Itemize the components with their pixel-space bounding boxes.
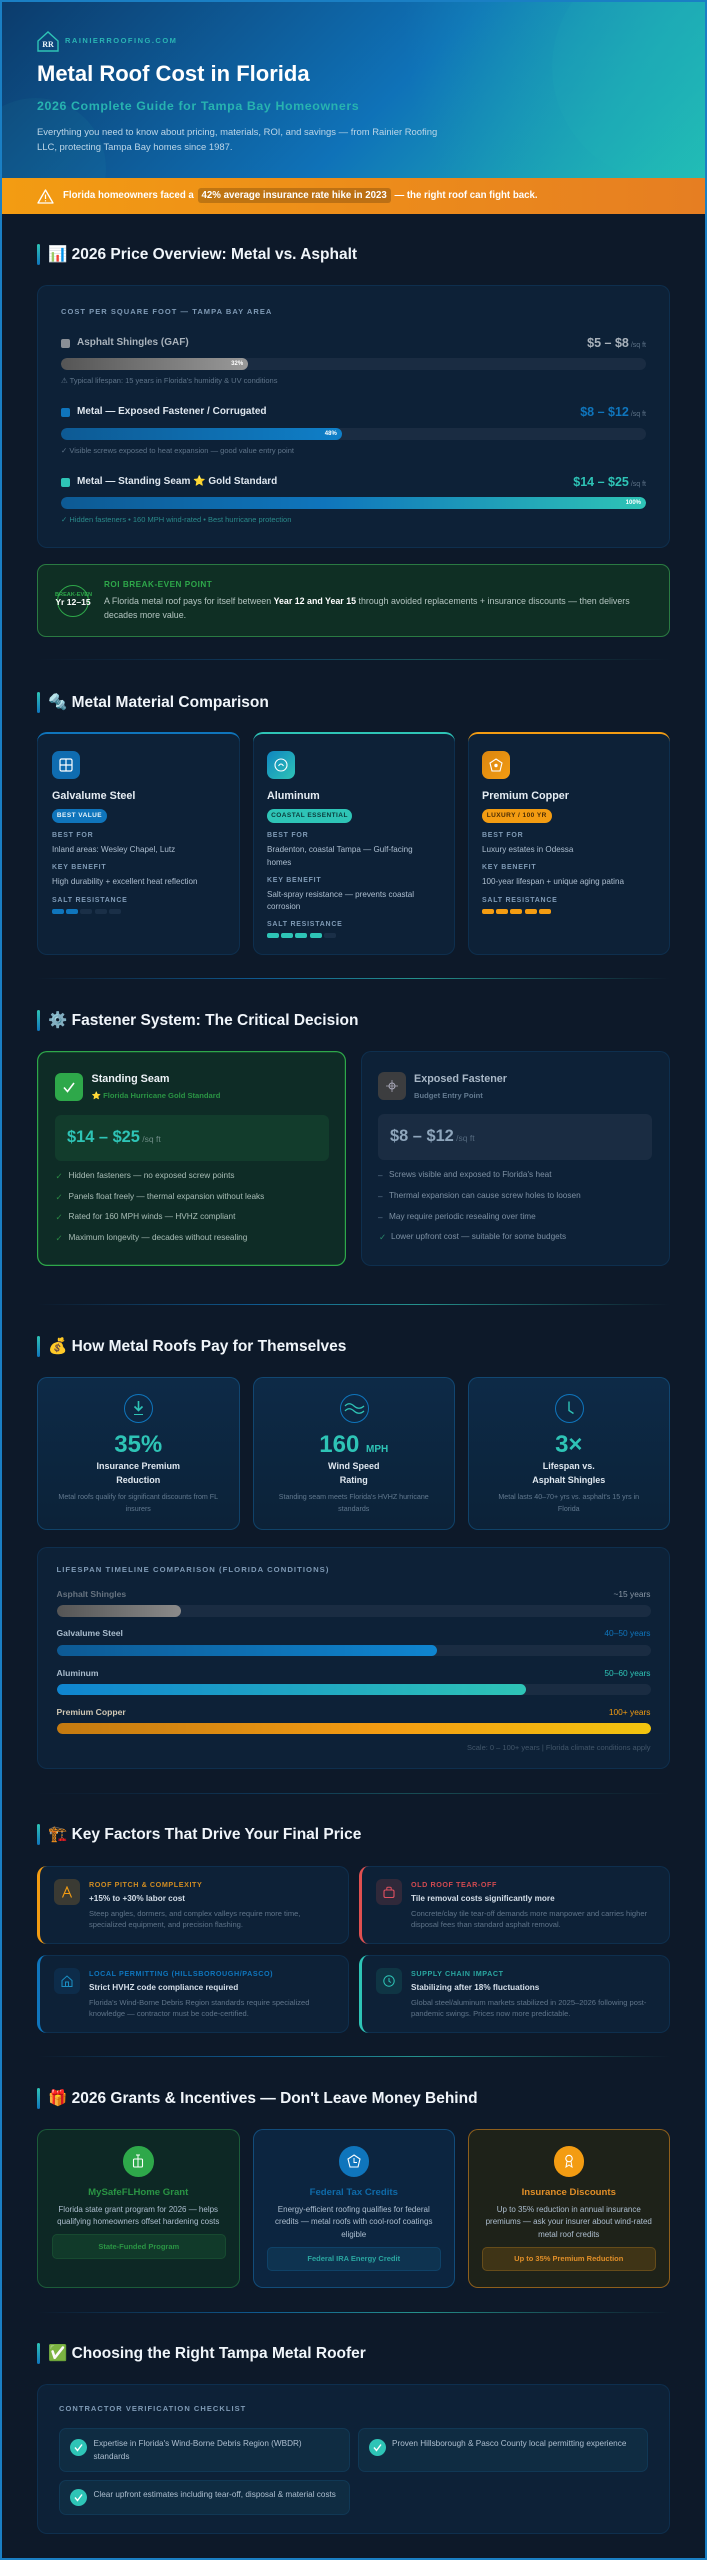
stat description [279,1492,429,1512]
feature list: ✓ [56,1192,62,1202]
grant title: MySafeFLHome Grant [88,2187,188,2198]
panel: standing seam [37,1051,346,1266]
panel: permitting [37,1955,348,2033]
details: 100-year lifespan + unique aging patina [482,877,624,886]
grant text: Florida state grant program for 2026 — helps [58,2205,218,2214]
price row: asphalt: ⚠ Typical lifespan: 15 years in Florida's humidity & UV conditions [61,376,277,385]
factor label: LOCAL PERMITTING (HILLSBOROUGH/PASCO) [89,1969,273,1978]
price row: standing seam: ✓ Hidden fasteners • 160 MPH wind-rated • Best hurricane protection [61,515,291,524]
checklist title: CONTRACTOR VERIFICATION CHECKLIST [59,2404,246,2413]
feature list: Thermal expansion can cause screw holes to loosen [389,1191,581,1200]
stat description: Metal lasts 40–70+ yrs vs. asphalt's 15 yrs in [498,1492,639,1500]
heading: fastener system: ⚙️ Fastener System: The Critical Decision [48,1012,358,1029]
heading: material comparison: 🔩 Metal Material Comparison [48,694,269,711]
badge: BEST VALUE [57,812,102,819]
factor description: disposal fees than standard asphalt removal. [411,1920,561,1929]
details: SALT RESISTANCE [267,921,343,928]
stat value: 160 MPH [319,1431,388,1458]
icon: gem [482,751,510,779]
heading: choosing roofer: ✅ Choosing the Right Tampa Metal Roofer [48,2345,366,2362]
factor description [411,1909,647,1929]
panel: tear-off [359,1866,670,1944]
heading: key factors: 🏗️ Key Factors That Drive Your Final Price [48,1826,361,1843]
timeline: galvalume: Galvalume Steel [56,1628,123,1638]
icon: wind [340,1394,369,1423]
badge: break-even circle [57,585,89,617]
details [267,832,414,938]
details: Salt-spray resistance — prevents coastal [267,890,414,898]
panel: lifespan timeline [37,1547,670,1769]
factor description: Concrete/clay tile tear-off demands more manpower and carries higher [411,1909,647,1918]
icon: house [54,1968,80,1994]
checklist item: permitting: Proven Hillsborough & Pasco County local permitting experience [392,2439,626,2448]
details: High durability + excellent heat reflection [52,877,198,886]
price box: $14 – $25 /sq ft [67,1128,161,1146]
timeline: aluminum: 50–60 years [604,1668,650,1678]
chart title: LIFESPAN TIMELINE COMPARISON (FLORIDA CONDITIONS) [56,1565,329,1574]
grant text [275,2205,432,2238]
price row: exposed fastener: Metal — Exposed Fastener / Corrugated [77,406,266,417]
feature list: Lower upfront cost — suitable for some budgets [391,1232,566,1241]
stat label [96,1461,180,1485]
badge [52,809,107,823]
factor headline: +15% to +30% labor cost [89,1894,185,1903]
material name: Premium Copper [482,790,569,802]
icon: pitch [54,1879,80,1905]
badge: COASTAL ESSENTIAL [271,812,348,819]
feature list: – [378,1212,383,1222]
panel: roof pitch [37,1866,348,1944]
brand url: RAINIERROOFING.COM [65,36,177,44]
grant text: Up to 35% reduction in annual insurance [497,2205,641,2214]
feature list: – [378,1171,383,1180]
details: Luxury estates in Odessa [482,845,573,854]
price row: asphalt: 32% [231,361,243,367]
grant tag [267,2246,440,2271]
icon: orange circle [554,2146,584,2176]
panel: wind stat [252,1377,455,1530]
details: BEST FOR [267,832,308,839]
panel: lifespan stat [468,1377,670,1530]
factor description: Steep angles, dormers, and complex valleys require more time, [89,1909,300,1918]
details: SALT RESISTANCE [52,897,128,904]
feature list [56,1171,264,1243]
alert banner [0,178,707,214]
panel: price overview [37,285,670,548]
badge: LUXURY / 100 YR [487,812,547,819]
grant tag [52,2234,226,2259]
icon: clock [555,1394,584,1423]
stat description: Metal roofs qualify for significant discounts from FL [58,1492,218,1500]
price box [55,1114,329,1161]
option subtitle: ⭐ Florida Hurricane Gold Standard [92,1091,220,1100]
timeline: aluminum: Aluminum [56,1668,99,1678]
header [0,0,707,178]
panel: galvalume steel [37,732,240,955]
grant text: eligible [341,2230,366,2238]
panel: insurance stat [37,1377,240,1530]
icon: clock [376,1968,402,1994]
grant title: Insurance Discounts [522,2187,616,2198]
details [482,832,624,914]
panel: aluminum [252,732,455,955]
intro text: Everything you need to know about pricing, materials, ROI, and savings — from Rainier Roofing [37,126,437,138]
icon: bag [376,1879,402,1905]
icon: circle [267,751,295,779]
feature list: Hidden fasteners — no exposed screw points [68,1171,235,1180]
factor description: knowledge — contractor must be code-certified. [89,2008,249,2018]
timeline: asphalt [56,1589,651,1617]
feature list: – [378,1192,383,1201]
timeline: copper: 100+ years [609,1706,650,1716]
stat description: insurers [126,1504,151,1512]
subtitle: 2026 Complete Guide for Tampa Bay Homeowners [37,99,359,113]
grant tag: Federal IRA Energy Credit [307,2254,400,2262]
checklist item: permitting [358,2428,648,2472]
option subtitle: Budget Entry Point [414,1090,483,1100]
alert text: Florida homeowners faced a 42% average insurance rate hike in 2023 — the right roof can fight back. [63,190,538,201]
icon: screw [378,1072,406,1100]
details: Bradenton, coastal Tampa — Gulf-facing [267,845,413,854]
stat label: Lifespan vs. [543,1461,595,1471]
logo: RR [42,40,54,49]
option title: Standing Seam [92,1073,170,1085]
panel: MySafeFLHome grant [37,2129,240,2288]
feature list: Maximum longevity — decades without resealing [68,1233,247,1242]
grant text: credits — metal roofs with cool-roof coatings [275,2217,432,2226]
icon: warning [37,189,54,204]
factor headline: Tile removal costs significantly more [411,1894,555,1903]
grant title: Federal Tax Credits [310,2187,398,2198]
grant tag: State-Funded Program [98,2242,179,2251]
stat label [532,1461,605,1485]
checklist item: WBDR [59,2428,350,2472]
panel: supply chain [359,1955,670,2033]
factor description [411,1998,646,2018]
feature list: May require periodic resealing over time [389,1212,536,1220]
panel: federal tax credits [252,2129,455,2288]
grant text [57,2205,220,2226]
heading: grants: 🎁 2026 Grants & Incentives — Don't Leave Money Behind [48,2090,478,2107]
stat label: Wind Speed [328,1461,379,1471]
callout text: A Florida metal roof pays for itself between Year 12 and Year 15 through avoided replacements + insurance discounts — then delivers decades more value. [104,596,630,620]
icon: grid [52,751,80,779]
icon: check [55,1073,83,1101]
grant text: qualifying homeowners offset hardening costs [57,2217,219,2226]
feature list: Screws visible and exposed to Florida's heat [389,1170,552,1179]
details: SALT RESISTANCE [482,897,558,904]
timeline: galvalume: 40–50 years [604,1628,650,1638]
price row: asphalt [61,336,646,385]
callout title: ROI BREAK-EVEN POINT [104,580,212,589]
price row: asphalt: $5 – $8 /sq ft [587,336,646,350]
badge [267,809,352,823]
timeline: copper: Premium Copper [56,1706,126,1716]
grant text: Energy-efficient roofing qualifies for federal [278,2205,430,2214]
badge [482,809,552,823]
checklist item: estimates: Clear upfront estimates including tear-off, disposal & material costs [94,2490,336,2499]
factor headline: Stabilizing after 18% fluctuations [411,1983,539,1992]
price row: asphalt: Asphalt Shingles (GAF) [77,337,189,348]
details [52,832,198,914]
heading: choosing roofer [37,2343,670,2364]
stat description [58,1492,218,1512]
badge: break-even circle: Yr 12–15 [55,597,91,607]
factor label: ROOF PITCH & COMPLEXITY [89,1880,202,1889]
feature list: ✓ [56,1172,62,1181]
stat label: Reduction [116,1475,160,1485]
details: homes [267,858,291,866]
stat description: Standing seam meets Florida's HVHZ hurricane [279,1492,429,1500]
option title: Exposed Fastener [414,1072,507,1084]
checklist item: WBDR: standards [94,2452,129,2460]
factor description: Florida's Wind-Borne Debris Region standards require specialized [89,1998,309,2007]
factor headline: Strict HVHZ code compliance required [89,1983,238,1992]
price row: exposed fastener: 48% [325,431,337,437]
grant tag: Up to 35% Premium Reduction [514,2254,623,2262]
title: Metal Roof Cost in Florida [37,61,310,86]
feature list: Rated for 160 MPH winds — HVHZ compliant [68,1212,235,1221]
panel: premium copper [468,732,670,955]
panel: exposed fastener [361,1051,670,1266]
heading: price overview: 📊 2026 Price Overview: Metal vs. Asphalt [48,246,357,263]
heading: payback: 💰 How Metal Roofs Pay for Themselves [48,1338,346,1355]
price row: standing seam: $14 – $25 /sq ft [573,475,646,489]
stat description: standards [338,1504,369,1512]
checklist item: WBDR: Expertise in Florida's Wind-Borne Debris Region (WBDR) [94,2439,302,2448]
icon: green circle [123,2146,154,2176]
timeline: aluminum [56,1668,651,1695]
material name: Galvalume Steel [52,790,135,802]
price box: $8 – $12 /sq ft [390,1127,475,1145]
stat label: Asphalt Shingles [532,1475,605,1485]
price row: standing seam: Metal — Standing Seam ⭐ Gold Standard [77,476,277,487]
scale note: Scale: 0 – 100+ years | Florida climate conditions apply [467,1742,650,1752]
price box [378,1114,652,1160]
feature list [378,1170,581,1242]
grant tag [482,2246,656,2271]
chart title: COST PER SQUARE FOOT — TAMPA BAY AREA [61,307,272,316]
material name: Aluminum [267,790,320,802]
timeline: asphalt: ~15 years [613,1589,650,1599]
intro text: LLC, protecting Tampa Bay homes since 1987. [37,142,233,152]
factor description [89,1909,300,1929]
stat label [328,1461,379,1485]
checklist item: estimates [59,2480,350,2515]
price row: exposed fastener: ✓ Visible screws exposed to heat expansion — good value entry point [61,446,294,455]
feature list: Panels float freely — thermal expansion without leaks [68,1192,264,1200]
grant text: premiums — ask your insurer about wind-rated [486,2217,652,2226]
stat label: Insurance Premium [96,1461,180,1471]
price row: standing seam: 100% [626,500,641,506]
grant text: metal roof credits [538,2230,599,2238]
factor label: SUPPLY CHAIN IMPACT [411,1969,504,1978]
factor label: OLD ROOF TEAR-OFF [411,1880,497,1889]
feature list: ✓ [56,1213,62,1222]
badge: break-even circle: BREAK-EVEN [55,592,92,598]
details: BEST FOR [52,832,93,839]
icon: blue circle [338,2146,369,2176]
panel: insurance discounts [468,2129,670,2288]
feature list: ✓ [379,1233,386,1242]
details: Inland areas: Wesley Chapel, Lutz [52,845,175,854]
panel: contractor checklist [37,2384,670,2534]
stat description [498,1492,639,1512]
intro text [37,126,437,152]
grant text [486,2205,652,2238]
details: BEST FOR [482,832,523,839]
callout: ROI break-even [37,564,670,637]
details: KEY BENEFIT [482,864,536,871]
factor description [89,1998,309,2018]
stat description: Florida [558,1504,580,1512]
stat value: 35% [114,1431,162,1458]
stat value: 3× [555,1431,582,1458]
timeline: asphalt: Asphalt Shingles [56,1589,126,1599]
price row: exposed fastener: $8 – $12 /sq ft [580,405,646,419]
icon: arrow down [124,1394,153,1423]
price row: exposed fastener [61,405,646,455]
timeline: copper [56,1706,651,1734]
factor description: pandemic swings. Prices now more predictable. [411,2008,570,2018]
details: KEY BENEFIT [267,876,321,884]
details: KEY BENEFIT [52,864,106,871]
price row: standing seam [61,475,646,524]
stat label: Rating [340,1475,368,1485]
timeline: galvalume [56,1628,651,1656]
feature list: ✓ [56,1234,62,1243]
details: corrosion [267,902,300,911]
factor description: specialized equipment, and precision flashing. [89,1920,243,1929]
factor description: Global steel/aluminum markets stabilized in 2025–2026 following post- [411,1998,646,2007]
logo [37,31,59,52]
